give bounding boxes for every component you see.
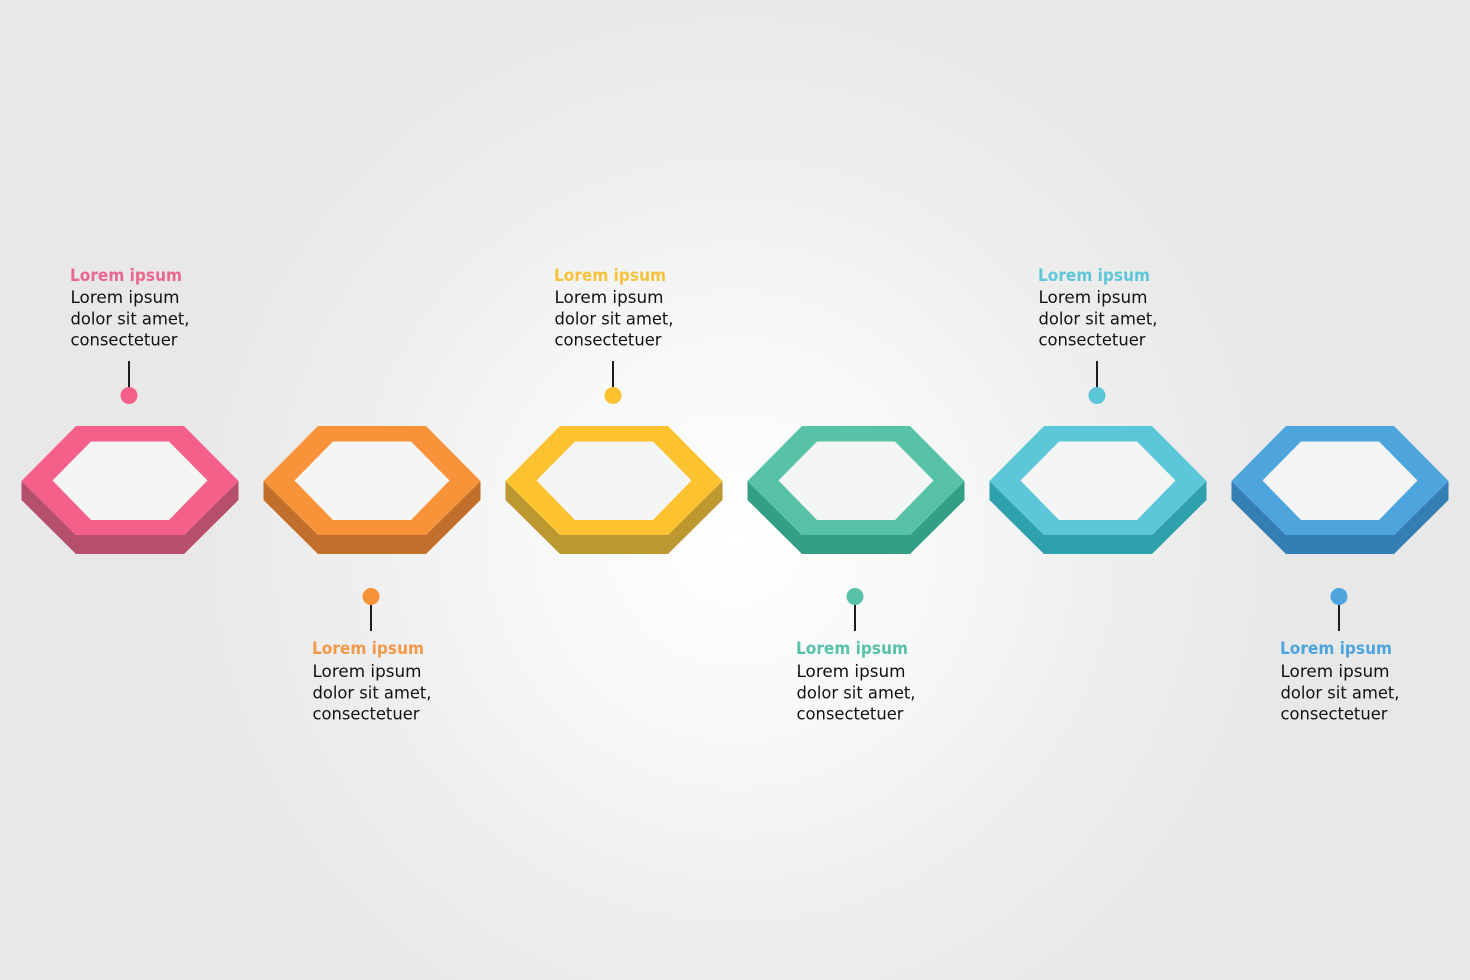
text 6: Lorem ipsum: [1280, 639, 1392, 658]
marker 6: [1330, 588, 1348, 631]
hexagon 5: [990, 426, 1206, 554]
text 3: [554, 266, 674, 350]
text 6: dolor sit amet,: [1280, 684, 1400, 704]
step 1: pink: [22, 266, 238, 554]
text 4: Lorem ipsum: [796, 662, 906, 682]
text 4: dolor sit amet,: [796, 684, 916, 704]
text 5: Lorem ipsum: [1038, 266, 1150, 285]
hexagon 2: [264, 426, 480, 554]
hexagon 3: [506, 426, 722, 554]
text 1: [70, 266, 190, 350]
text 2: Lorem ipsum: [312, 639, 424, 658]
text 4: Lorem ipsum: [796, 639, 908, 658]
text 2: Lorem ipsum: [312, 662, 422, 682]
text 2: consectetuer: [312, 704, 420, 724]
text 6: [1280, 639, 1400, 724]
text 1: Lorem ipsum: [70, 266, 182, 285]
text 3: dolor sit amet,: [554, 310, 674, 330]
text 1: dolor sit amet,: [70, 310, 190, 330]
text 6: Lorem ipsum: [1280, 662, 1390, 682]
step 6: blue: [1232, 426, 1448, 724]
text 5: Lorem ipsum: [1038, 288, 1148, 308]
text 4: consectetuer: [796, 704, 904, 724]
text 3: Lorem ipsum: [554, 266, 666, 285]
text 6: consectetuer: [1280, 704, 1388, 724]
step 2: orange: [264, 426, 480, 724]
hexagon 1: [22, 426, 238, 554]
hexagon 6: [1232, 426, 1448, 554]
text 5: [1038, 266, 1158, 350]
step 4: green: [748, 426, 964, 724]
text 4: [796, 639, 916, 724]
marker 4: [846, 588, 864, 631]
marker 5: [1088, 361, 1106, 404]
text 1: consectetuer: [70, 330, 178, 350]
text 2: [312, 639, 432, 724]
step 3: yellow: [506, 266, 722, 554]
text 5: dolor sit amet,: [1038, 310, 1158, 330]
marker 1: [120, 361, 138, 404]
text 3: consectetuer: [554, 330, 662, 350]
hexagon 4: [748, 426, 964, 554]
marker 3: [604, 361, 622, 404]
text 3: Lorem ipsum: [554, 288, 664, 308]
text 1: Lorem ipsum: [70, 288, 180, 308]
text 2: dolor sit amet,: [312, 684, 432, 704]
text 5: consectetuer: [1038, 330, 1146, 350]
step 5: cyan: [990, 266, 1206, 554]
marker 2: [362, 588, 380, 631]
